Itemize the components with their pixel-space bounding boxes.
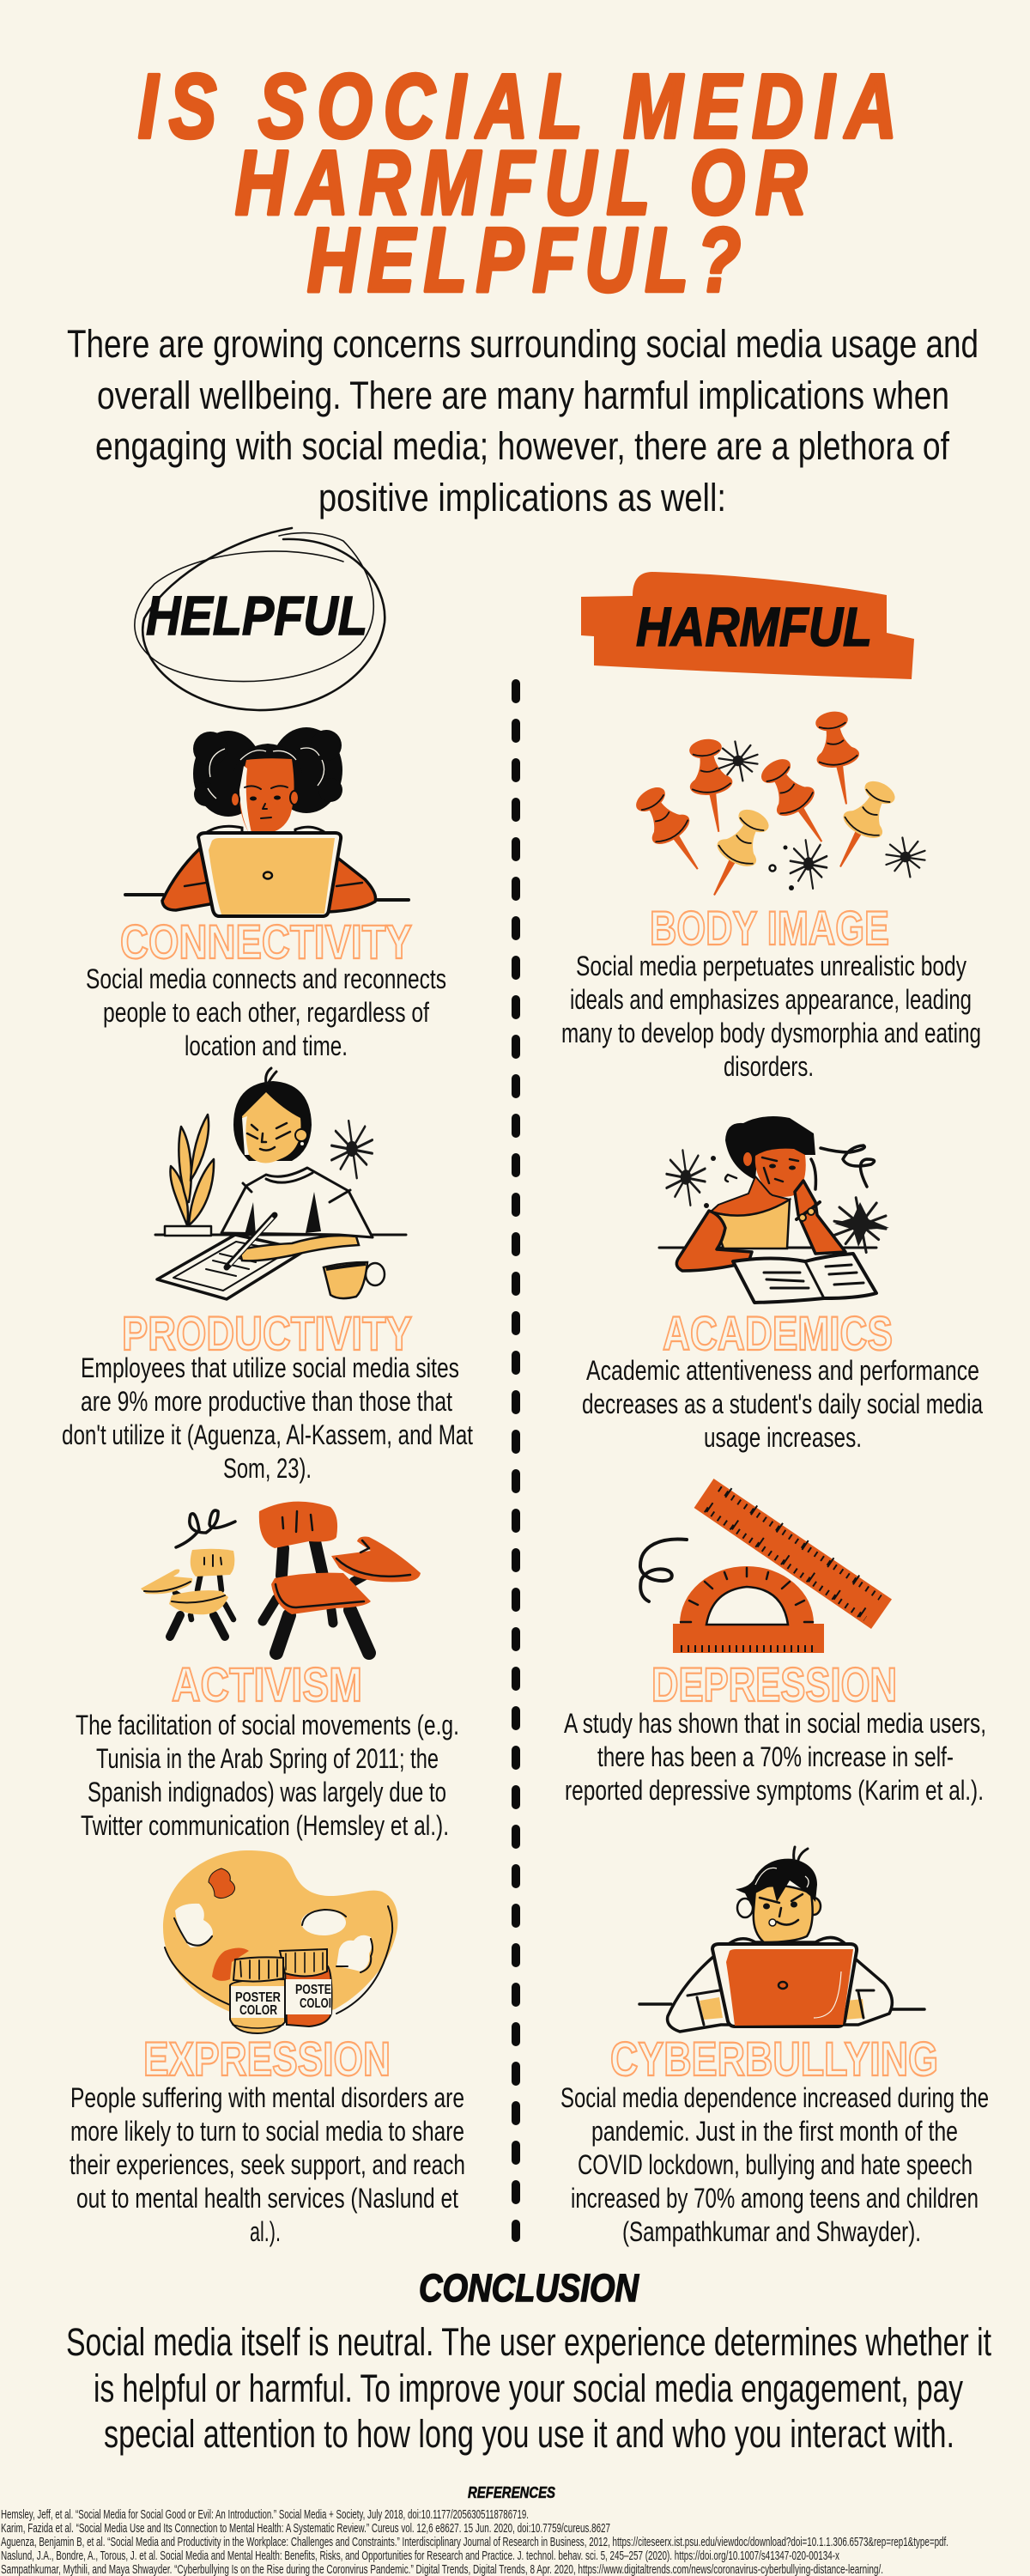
text: expression: their experiences, seek support, and reach [70,2149,465,2180]
text: activism: Tunisia in the Arab Spring of 2011; the [96,1743,439,1774]
back jar: COLOI [300,1996,331,2011]
text: productivity [62,1352,473,1484]
text: conclusion [66,2320,991,2456]
back jar [280,1949,331,2026]
title [138,56,897,311]
heading: expression: EXPRESSION [143,2032,391,2086]
text: productivity: Employees that utilize social media sites [81,1352,459,1383]
heading: connectivity: CONNECTIVITY [120,914,412,969]
helpful badge [135,528,385,710]
text: activism: Twitter communication (Hemsley et al.). [81,1810,449,1841]
illustration: palette and paint jars [163,1850,397,2033]
heading: conclusion: CONCLUSION [419,2266,639,2310]
text: expression: out to mental health services (Naslund et [76,2183,458,2214]
text: academics: usage increases. [704,1422,862,1453]
text: productivity: Som, 23). [223,1453,312,1484]
text: expression [70,2082,465,2247]
front jar: COLOR [239,2003,277,2018]
text: expression: People suffering with mental disorders are [70,2082,464,2113]
text: body image: disorders. [724,1051,814,1082]
references list: Hemsley, Jeff, et al. “Social Media for Social Good or Evil: An Introduction.” Social Media + Society, July 2018, doi:10.1177/2056305118786719. [1,2507,529,2522]
harmful badge [581,572,914,679]
heading: references: REFERENCES [468,2484,555,2501]
text: academics [582,1355,983,1453]
heading: academics: ACADEMICS [663,1306,893,1360]
large chair [259,1502,421,1653]
front jar label: POSTER [235,1990,281,2005]
title: IS SOCIAL MEDIA [138,56,897,157]
text: cyberbullying: (Sampathkumar and Shwayder). [622,2216,921,2247]
front jar [230,1957,285,2033]
text: expression: more likely to turn to social media to share [70,2116,464,2147]
heading: cyberbullying: CYBERBULLYING [610,2032,938,2086]
intro paragraph [67,322,978,519]
text: productivity: are 9% more productive than those that [81,1386,452,1417]
intro paragraph: positive implications as well: [318,476,726,519]
illustration: woman writing [155,1068,406,1299]
heading: depression: DEPRESSION [651,1657,897,1711]
illustration: boy at laptop [639,1847,924,2032]
illustration: ruler and protractor [640,1479,892,1653]
heading: productivity: PRODUCTIVITY [122,1306,412,1360]
heading: body image: BODY IMAGE [650,901,889,955]
chest and neck [711,1176,790,1216]
back jar label: POSTE [295,1983,331,1997]
star [331,1121,373,1178]
plant [165,1115,214,1236]
dashed divider [512,683,520,2238]
ruler [694,1479,892,1629]
small chair [141,1549,234,1637]
text: activism [76,1710,459,1841]
text: connectivity [86,963,446,1061]
illustration: push pins [627,708,925,905]
cup [366,1263,385,1285]
illustration: chairs [141,1502,421,1653]
protractor [673,1566,824,1653]
text: activism: The facilitation of social movements (e.g. [76,1710,459,1741]
tablet [157,1235,306,1299]
illustration: girl reading [659,1116,889,1303]
references list [1,2507,948,2576]
helpful label: HELPFUL [146,585,367,647]
illustration: woman at laptop [125,727,409,916]
title: HELPFUL? [307,210,741,311]
title: HARMFUL OR [235,132,807,234]
heading: activism: ACTIVISM [172,1657,362,1711]
text: productivity: don't utilize it (Aguenza, Al-Kassem, and Mat [62,1419,473,1450]
text: connectivity: location and time. [185,1030,348,1061]
text: expression: al.). [250,2216,281,2247]
references list: Karim, Fazida et al. “Social Media Use and Its Connection to Mental Health: A Systematic Review.” Cureus vol. 12,6 e8627. 15 Jun. 2020, doi:10.7759/cureus.8627 [1,2521,610,2536]
text: depression [564,1708,986,1806]
text: activism: Spanish indignados) was largely due to [88,1777,446,1807]
harmful label: HARMFUL [636,596,872,658]
text: connectivity: Social media connects and reconnects [86,963,446,994]
text: body image [561,951,981,1082]
text: connectivity: people to each other, regardless of [103,997,429,1028]
text: cyberbullying [560,2082,989,2247]
